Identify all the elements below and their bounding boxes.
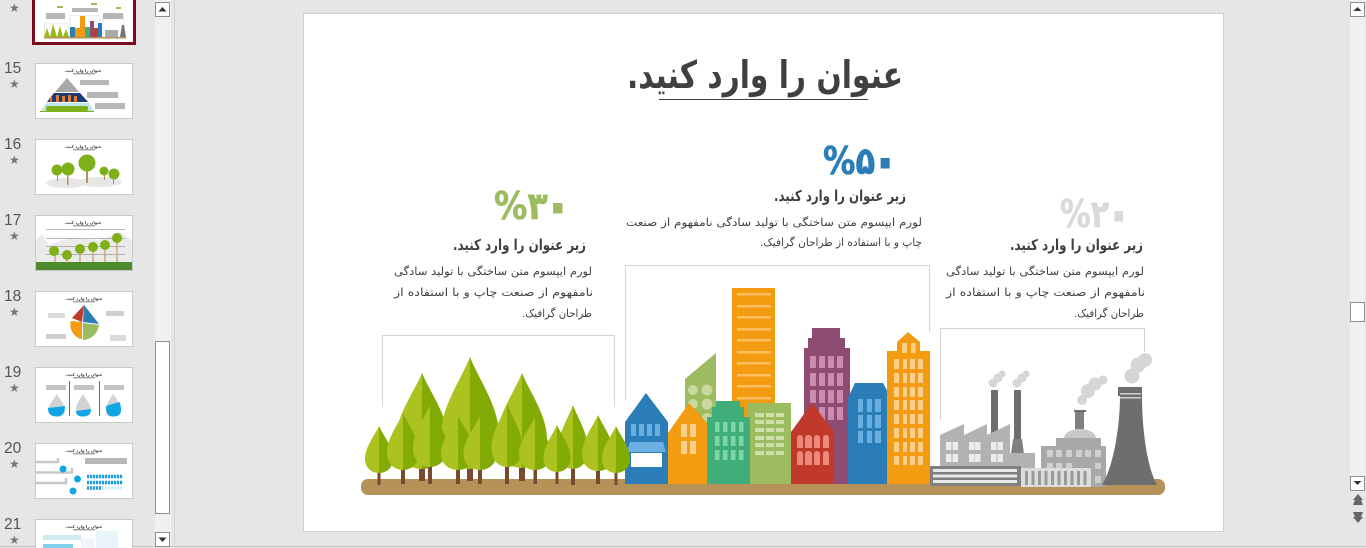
red house (791, 403, 834, 484)
smoke (988, 353, 1152, 405)
slide numbers: ★ (9, 457, 20, 471)
purple building (804, 328, 850, 484)
thumbnail 18 (36, 292, 132, 346)
illustration: forest (365, 357, 614, 485)
thumbnail 19 (36, 368, 132, 422)
text block: 20 percent: نامفهوم از صنعت چاپ و با استفاده از‏ (945, 286, 1145, 299)
striped low building (930, 466, 1021, 486)
slide numbers: ★ (9, 153, 20, 167)
slide numbers: ★ (9, 1, 20, 15)
title: عنوان را وارد کنید.‏ (627, 53, 903, 98)
text block: 50 percent: لورم ایپسوم متن ساختگی با تولید سادگی نامفهوم از صنعت‏ (626, 216, 922, 229)
thumbnail 19: عنوان را وارد کنید. (65, 372, 103, 377)
chimneys (991, 390, 998, 434)
slide numbers: 15 (4, 60, 21, 77)
thumbnail 16 (36, 140, 132, 194)
slide numbers: 18 (4, 288, 21, 305)
text block: 30 percent: زیر عنوان را وارد کنید.‏ (453, 236, 586, 254)
thumbnail 18: عنوان را وارد کنید. (65, 296, 103, 301)
text block: 20 percent: لورم ایپسوم متن ساختگی با تولید سادگی‏ (946, 265, 1144, 278)
right scrollbar (1350, 0, 1365, 523)
slide numbers: 17 (4, 212, 21, 229)
slide numbers: ★ (9, 229, 20, 243)
panel: slide thumbnails (4, 0, 134, 548)
orange house (668, 403, 707, 484)
thumbnail 20 (36, 444, 132, 498)
illustration: factory (930, 353, 1157, 487)
tree in front of blue house (602, 426, 630, 485)
light green building (748, 403, 791, 484)
ground (361, 479, 1165, 495)
thumbnail 15: عنوان را وارد کنید. (64, 68, 102, 73)
text block: 30 percent: لورم ایپسوم متن ساختگی با تولید سادگی‏ (394, 265, 592, 278)
thumbnail 17: عنوان را وارد کنید. (64, 220, 102, 225)
domed building (1041, 410, 1106, 487)
thumbnail 21: عنوان را وارد کنید. (65, 524, 103, 529)
orange tall building (887, 332, 930, 484)
text block: 20 percent: %۲۰ (1060, 192, 1128, 236)
text block: 30 percent: نامفهوم از صنعت چاپ و با استفاده از‏ (393, 286, 593, 299)
text block: 30 percent: %۳۰ (494, 184, 568, 228)
fence block (1021, 468, 1091, 487)
slide numbers: 19 (4, 364, 21, 381)
thumbnail 21 (36, 520, 132, 548)
text block: 30 percent: طراحان گرافیک.‏ (522, 307, 592, 320)
left scrollbar (155, 0, 171, 546)
green slanted building (685, 353, 716, 484)
panel: slide (304, 14, 1224, 532)
slide numbers: 16 (4, 136, 21, 153)
slide numbers: ★ (9, 381, 20, 395)
orange tower (732, 288, 775, 484)
slide numbers: 21 (4, 516, 21, 533)
slide numbers: ★ (9, 305, 20, 319)
thumbnail 16: عنوان را وارد کنید. (64, 144, 102, 149)
text block: 20 percent: زیر عنوان را وارد کنید.‏ (1010, 236, 1143, 254)
thumbnail 14 selected (34, 0, 134, 44)
slide numbers (4, 1, 22, 547)
text block: 50 percent (626, 139, 922, 249)
frames behind illustrations (382, 266, 1144, 420)
text block: 30 percent (393, 184, 593, 320)
slide numbers: ★ (9, 533, 20, 547)
text block: 20 percent (945, 192, 1145, 320)
blue house with awning (625, 393, 668, 484)
green building (707, 401, 750, 484)
thumbnail 15 (36, 64, 132, 118)
saw-tooth factory (940, 424, 1035, 470)
illustration: city (625, 288, 930, 484)
blue building (848, 383, 891, 484)
text block: 20 percent: طراحان گرافیک.‏ (1074, 307, 1144, 320)
slide numbers: ★ (9, 77, 20, 91)
text block: 50 percent: چاپ و با استفاده از طراحان گرافیک.‏ (760, 236, 922, 249)
thumbnail 20: عنوان را وارد کنید. (65, 448, 103, 453)
cooling tower (1102, 387, 1157, 485)
thumbnail 17 (36, 216, 132, 270)
text block: 50 percent: زیر عنوان را وارد کنید.‏ (774, 187, 906, 205)
text block: 50 percent: %۵۰ (823, 139, 895, 183)
slide numbers: 20 (4, 440, 22, 457)
